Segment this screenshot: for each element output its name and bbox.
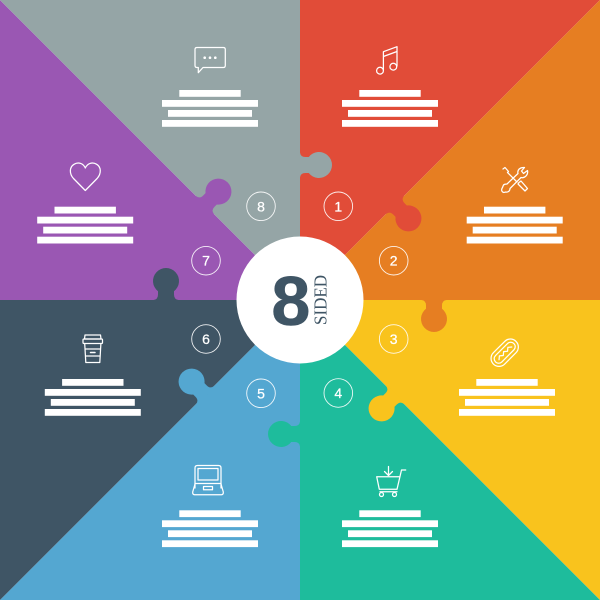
- tab: purple into gray: [195, 173, 237, 215]
- wedge: dark slate: [0, 300, 300, 600]
- wedge: red: [300, 0, 600, 300]
- icon: shopping cart: [377, 466, 406, 496]
- tab: orange into yellow: [421, 298, 447, 332]
- icon: wrench and screwdriver: [502, 167, 528, 192]
- tab: dark slate into purple: [153, 268, 179, 302]
- step 7 number: 7: [202, 253, 210, 269]
- text bars: orange panel: [467, 207, 563, 244]
- step 7 number: [192, 246, 220, 275]
- puzzle tabs: [153, 152, 447, 447]
- step 5 number: 5: [257, 385, 265, 401]
- tab: yellow into green: [363, 385, 405, 427]
- step 4 number: 4: [334, 385, 342, 401]
- text bars: blue panel: [162, 510, 258, 547]
- center badge: [236, 236, 364, 364]
- white circle: [236, 236, 364, 364]
- word SIDED: SIDED: [310, 275, 330, 325]
- text bars: red panel: [342, 90, 438, 127]
- tab: green into blue: [268, 421, 302, 447]
- tab: gray into red: [298, 152, 332, 178]
- icon: hot dog: [488, 336, 522, 370]
- wedge: purple: [0, 0, 300, 300]
- step 3 number: [379, 325, 408, 353]
- step 4 number: [324, 379, 353, 407]
- icon: laptop: [193, 466, 223, 495]
- step 8 number: 8: [257, 198, 265, 214]
- text bars: yellow panel: [459, 379, 555, 416]
- icon: heart: [70, 163, 100, 190]
- step 6 number: 6: [202, 331, 210, 347]
- tab: red into orange: [385, 195, 427, 237]
- text bars: dark slate panel: [45, 379, 141, 416]
- text bars: purple panel: [37, 207, 133, 244]
- text bars: gray panel: [162, 90, 258, 127]
- icon: coffee cup: [83, 335, 102, 362]
- wedge: orange: [300, 0, 600, 300]
- step 8 number: [247, 192, 275, 221]
- step 2 number: [379, 246, 408, 275]
- big number 8: 8: [271, 262, 310, 340]
- wedge: blue: [0, 300, 300, 600]
- step 3 number: 3: [390, 331, 398, 347]
- tab: blue into dark slate: [173, 363, 215, 405]
- step 5 number: [247, 379, 275, 408]
- step 2 number: 2: [390, 253, 398, 269]
- step 1 number: 1: [334, 198, 342, 214]
- icon: speech bubble: [195, 48, 225, 73]
- step 1 number: [324, 192, 353, 221]
- icon: music note: [377, 47, 397, 74]
- wedge: green: [300, 300, 600, 600]
- text bars: green panel: [342, 510, 438, 547]
- wedge: yellow: [300, 300, 600, 600]
- wedge: gray: [0, 0, 300, 300]
- step 6 number: [192, 325, 220, 353]
